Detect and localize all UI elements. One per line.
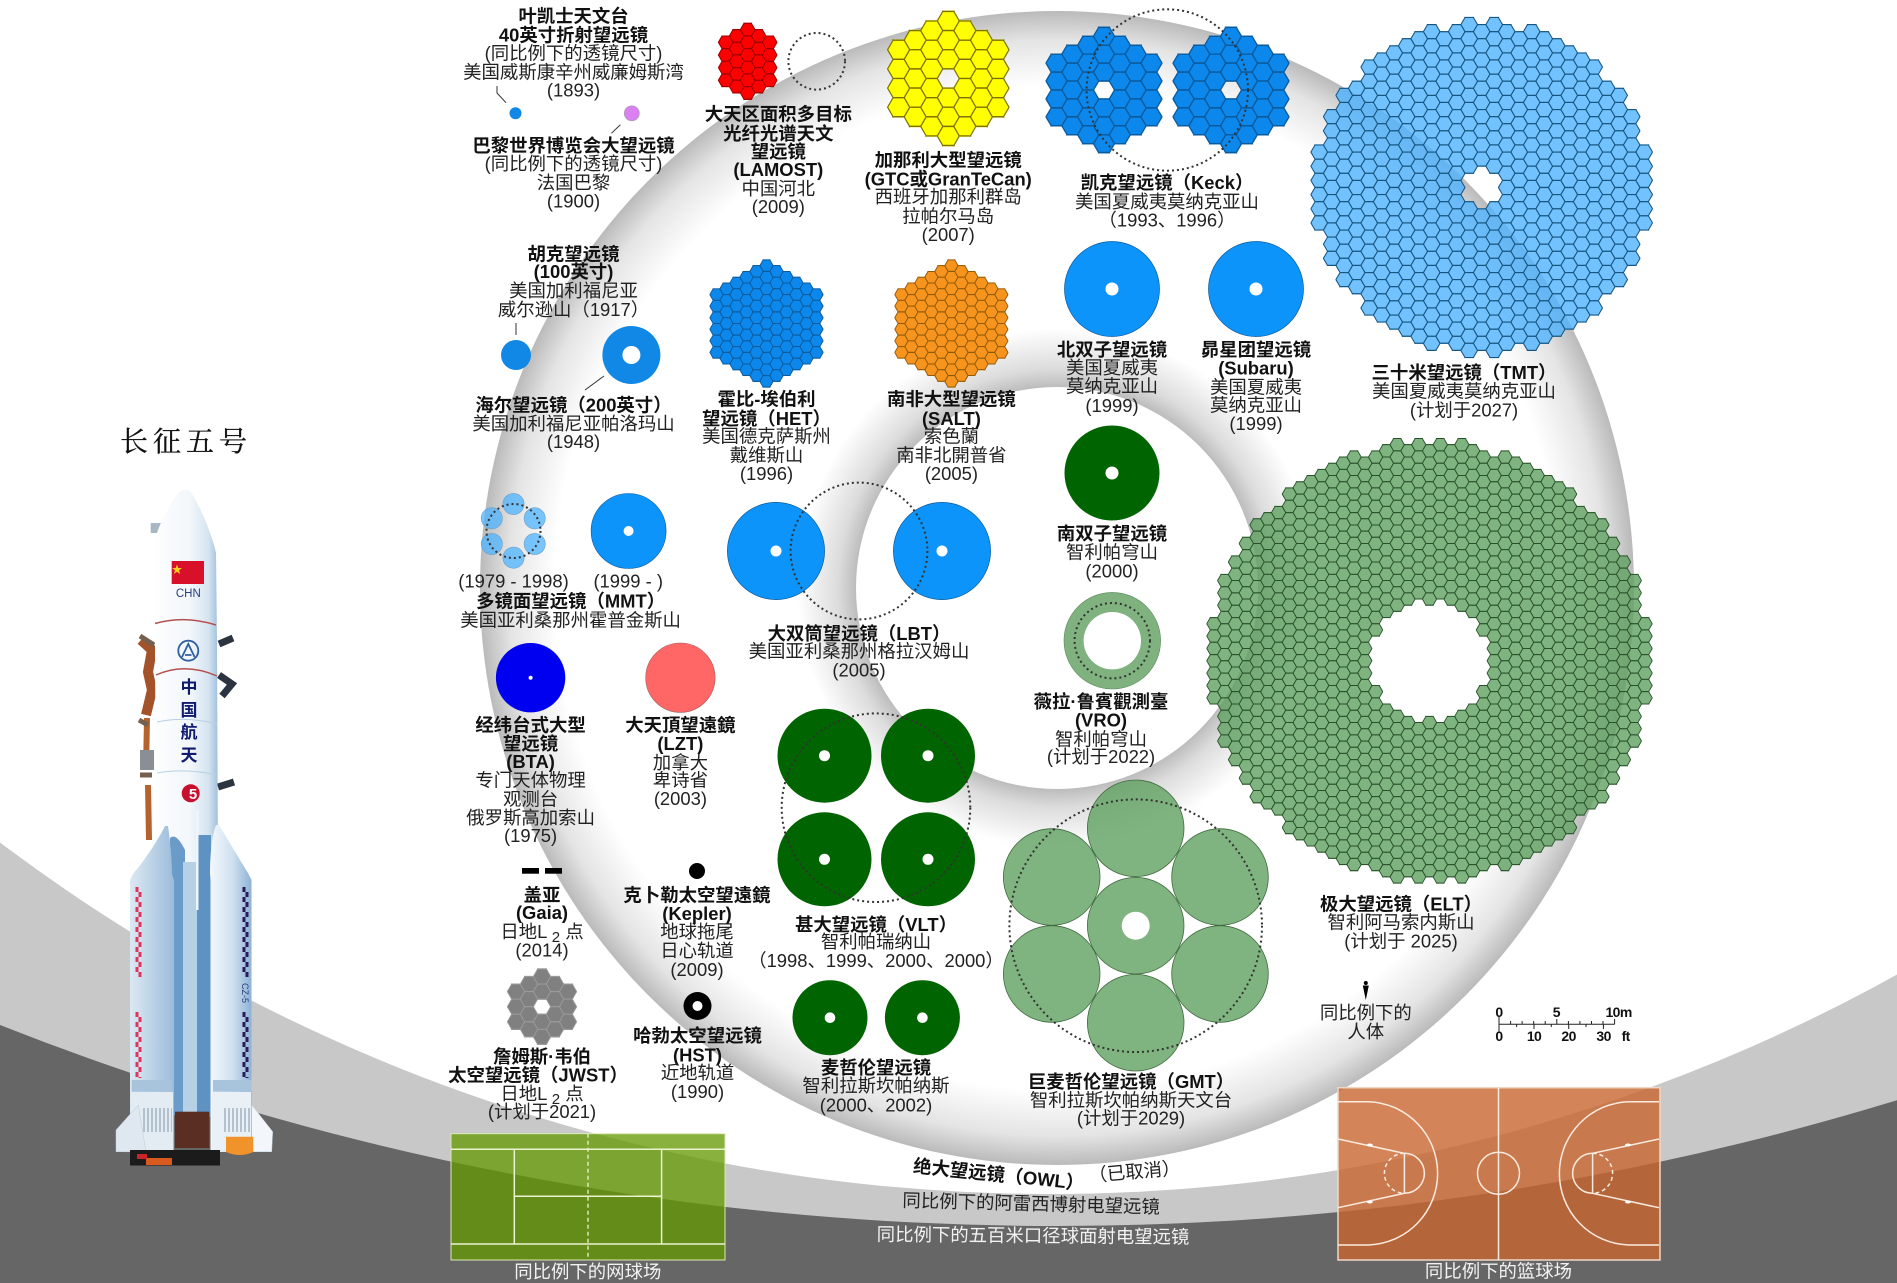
icon: LZT mirror bbox=[646, 643, 715, 712]
label: VLT: 智利帕瑞纳山 bbox=[821, 931, 931, 952]
engine nozzles bbox=[130, 1150, 220, 1166]
label: JWST: 詹姆斯·韦伯 bbox=[493, 1046, 591, 1067]
icon: HET mirror bbox=[710, 259, 824, 388]
label: Kepler: 地球拖尾 bbox=[660, 921, 734, 942]
label: SALT: (2005) bbox=[925, 463, 978, 484]
label: Gaia: 2 bbox=[552, 929, 560, 946]
label: Gaia: (2014) bbox=[515, 940, 569, 960]
label: Keck: （1993、1996） bbox=[1098, 210, 1236, 230]
telescope: Hooker bbox=[498, 244, 649, 370]
label: LZT: 大天頂望遠鏡 bbox=[625, 714, 736, 736]
icon: Hale mirror bbox=[585, 326, 660, 390]
icon: Long March logo: 5 bbox=[189, 786, 197, 803]
rocket marking: CHN: CHN bbox=[176, 588, 201, 600]
label: Yerkes: 美国威斯康辛州威廉姆斯湾 bbox=[463, 62, 684, 82]
icon: JWST mirror bbox=[507, 968, 577, 1045]
title: Long March 5: 长征五号 bbox=[120, 426, 252, 458]
icon: Keck II mirror bbox=[1172, 26, 1290, 154]
label: TMT: 三十米望远镜（TMT） bbox=[1372, 362, 1556, 383]
label: Hooker: 美国加利福尼亚 bbox=[509, 280, 638, 301]
scale bar: 5 bbox=[1553, 1004, 1561, 1020]
telescope: Magellan bbox=[792, 980, 960, 1116]
label: SALT: (SALT) bbox=[922, 408, 981, 429]
label: JWST: 太空望远镜（JWST） bbox=[448, 1064, 628, 1086]
caption: OWL cancelled: （已取消） bbox=[1088, 1157, 1181, 1186]
label: Gemini South: (2000) bbox=[1085, 560, 1139, 582]
label: BTA: (1975) bbox=[504, 825, 557, 846]
icon: Subaru mirror bbox=[1208, 242, 1304, 336]
label: TMT: 美国夏威夷莫纳克亚山 bbox=[1372, 380, 1556, 402]
rocket marking: China Aerospace bbox=[180, 678, 198, 765]
icon: Gemini North mirror bbox=[1064, 242, 1160, 336]
label: Magellan: (2000、2002) bbox=[820, 1094, 932, 1116]
label: Gemini North: 北双子望远镜 bbox=[1057, 339, 1167, 360]
icon: Long March logo bbox=[182, 784, 200, 803]
icon: Hooker mirror bbox=[501, 323, 531, 370]
caption: tennis court: 同比例下的网球场 bbox=[514, 1261, 661, 1282]
label: Hooker: 威尔逊山（1917） bbox=[498, 299, 649, 320]
label: Hooker: 胡克望远镜 bbox=[528, 244, 619, 264]
telescope: Paris Exposition bbox=[472, 106, 675, 212]
icon: Yerkes lens bbox=[497, 86, 522, 119]
label: Subaru: 美国夏威夷 bbox=[1210, 376, 1302, 398]
label: Hale: 美国加利福尼亚帕洛玛山 bbox=[472, 413, 675, 434]
label: LAMOST: 大天区面积多目标 bbox=[705, 104, 852, 124]
scale bar: 10 bbox=[1527, 1028, 1542, 1044]
label: Yerkes: (同比例下的透镜尺寸) bbox=[485, 42, 662, 64]
telescope: LZT bbox=[625, 643, 736, 809]
icon: VRO mirror bbox=[1064, 592, 1161, 689]
icon: Kepler mirror bbox=[689, 863, 705, 879]
label: HET: 戴维斯山 bbox=[730, 444, 803, 466]
icon: MMT old six mirrors bbox=[481, 493, 545, 568]
label: GMT: 智利拉斯坎帕纳斯天文台 bbox=[1030, 1090, 1232, 1110]
label: HET: 霍比-埃伯利 bbox=[717, 388, 816, 410]
label: GTC: (GTC或GranTeCan) bbox=[865, 168, 1032, 190]
telescope: MMT bbox=[458, 493, 681, 630]
icon: Gaia mirrors bbox=[522, 868, 562, 874]
caption: OWL: 绝大望远镜（OWL） bbox=[912, 1155, 1085, 1194]
label: LAMOST: 中国河北 bbox=[742, 178, 815, 199]
label: Gaia: (Gaia) bbox=[516, 902, 568, 923]
label: ELT: 极大望远镜（ELT） bbox=[1320, 894, 1482, 914]
telescope: VRO bbox=[1034, 592, 1168, 767]
telescope: GMT bbox=[1003, 780, 1268, 1128]
label: GTC: (2007) bbox=[922, 224, 975, 245]
icon: GMT mirrors bbox=[1003, 780, 1268, 1071]
icon: Paris lens bbox=[611, 106, 639, 133]
icon: Keck I mirror bbox=[1045, 26, 1163, 154]
label: GTC: 拉帕尔马岛 bbox=[902, 206, 994, 226]
telescope: ELT bbox=[1207, 408, 1663, 951]
label: JWST: 点 bbox=[560, 1083, 584, 1104]
label: Kepler: (2009) bbox=[670, 959, 724, 980]
scale figure: human bbox=[1320, 981, 1412, 1042]
telescope: BTA bbox=[466, 643, 595, 846]
telescope: JWST bbox=[448, 968, 616, 1122]
label: JWST: 2 bbox=[552, 1091, 560, 1108]
label: LAMOST: 望远镜 bbox=[751, 141, 806, 162]
telescope: LBT bbox=[727, 483, 991, 680]
label: Subaru: 昴星团望远镜 bbox=[1201, 339, 1311, 360]
label: Paris Exposition: (同比例下的透镜尺寸) bbox=[485, 153, 662, 174]
scale bar: 0 bbox=[1495, 1004, 1503, 1020]
label: HET: 望远镜（HET） bbox=[702, 408, 831, 429]
caption: basketball court: 同比例下的篮球场 bbox=[1425, 1260, 1572, 1282]
label: human: 同比例下的 bbox=[1320, 1002, 1412, 1023]
label: Hooker: (100英寸) bbox=[534, 261, 613, 282]
label: SALT: 索色蘭 bbox=[924, 426, 979, 446]
label: BTA: 望远镜 bbox=[503, 733, 558, 754]
telescope: TMT bbox=[1310, 16, 1653, 420]
icon: Gemini South mirror bbox=[1064, 426, 1160, 520]
label: LAMOST: 光纤光谱天文 bbox=[723, 123, 833, 144]
label: JWST: (计划于2021) bbox=[488, 1101, 596, 1122]
label: Magellan: 麦哲伦望远镜 bbox=[821, 1057, 931, 1078]
scale bar: 0 bbox=[1495, 1028, 1503, 1044]
label: LZT: 加拿大 bbox=[653, 752, 708, 773]
caption: FAST: 同比例下的五百米口径球面射电望远镜 bbox=[877, 1224, 1189, 1247]
icon: human silhouette bbox=[1363, 981, 1369, 1000]
scale bar: 30 bbox=[1596, 1028, 1612, 1044]
label: Kepler: (Kepler) bbox=[662, 903, 732, 924]
rocket marking: China Aerospace: 天 bbox=[180, 746, 198, 765]
rocket marking: China Aerospace: 航 bbox=[180, 722, 198, 742]
scale bar: 10m bbox=[1605, 1004, 1632, 1020]
label: BTA: 观测台 bbox=[503, 788, 558, 810]
icon: VLT mirrors bbox=[778, 709, 975, 906]
label: VLT: 甚大望远镜（VLT） bbox=[795, 914, 957, 935]
label: Hubble: 近地轨道 bbox=[661, 1062, 734, 1083]
icon: GTC mirror bbox=[887, 10, 1010, 146]
label: Gaia: 点 bbox=[560, 921, 584, 942]
telescope: Gaia bbox=[500, 868, 584, 960]
label: Subaru: 莫纳克亚山 bbox=[1210, 394, 1302, 416]
scale bar: 20 bbox=[1561, 1028, 1577, 1044]
label: ELT: 智利阿马索内斯山 bbox=[1327, 912, 1475, 932]
icon: Magellan mirrors bbox=[792, 980, 960, 1055]
label: Subaru: (Subaru) bbox=[1218, 358, 1294, 378]
label: VLT: （1998、1999、2000、2000） bbox=[748, 950, 1004, 971]
label: VRO: 智利帕穹山 bbox=[1055, 728, 1147, 750]
telescope: VLT bbox=[748, 709, 1004, 971]
label: GTC: 西班牙加那利群岛 bbox=[875, 186, 1022, 207]
telescope: SALT bbox=[888, 259, 1016, 484]
icon: Keck dotted aperture bbox=[1087, 9, 1248, 171]
label: LZT: (LZT) bbox=[657, 733, 703, 754]
icon: MMT new mirror bbox=[591, 494, 666, 568]
label: BTA: 专门天体物理 bbox=[475, 770, 586, 790]
label: MMT: 美国亚利桑那州霍普金斯山 bbox=[460, 610, 681, 630]
label: MMT: (1979 - 1998) bbox=[458, 570, 569, 592]
label: LBT: 美国亚利桑那州格拉汉姆山 bbox=[749, 640, 969, 662]
label: LBT: 大双筒望远镜（LBT） bbox=[768, 623, 950, 644]
label: Gemini North: (1999) bbox=[1085, 395, 1139, 416]
telescope: Yerkes bbox=[463, 6, 684, 119]
label: BTA: 经纬台式大型 bbox=[475, 714, 586, 736]
label: Paris Exposition: (1900) bbox=[547, 190, 600, 212]
icon: SALT mirror bbox=[894, 259, 1008, 388]
label: Paris Exposition: 巴黎世界博览会大望远镜 bbox=[472, 135, 675, 156]
label: VRO: 薇拉·鲁賓觀測臺 bbox=[1034, 691, 1168, 712]
label: GMT: (计划于2029) bbox=[1077, 1108, 1185, 1128]
scale bar: ft bbox=[1622, 1028, 1631, 1044]
rocket: Long March 5 bbox=[116, 490, 273, 1166]
label: Magellan: 智利拉斯坎帕纳斯 bbox=[802, 1075, 950, 1096]
telescope: Gemini North bbox=[1057, 242, 1167, 416]
telescope: Keck bbox=[1045, 8, 1290, 228]
label: Yerkes: (1893) bbox=[547, 80, 600, 100]
label: Paris Exposition: 法国巴黎 bbox=[537, 172, 610, 193]
label: human: 人体 bbox=[1347, 1021, 1384, 1042]
label: Gemini North: 莫纳克亚山 bbox=[1066, 376, 1158, 396]
engine section bbox=[175, 1112, 209, 1148]
telescope: Gemini South bbox=[1057, 426, 1167, 582]
label: SALT: 南非大型望远镜 bbox=[887, 388, 1016, 410]
label: Hale: 海尔望远镜（200英寸） bbox=[475, 394, 672, 416]
tennis court bbox=[451, 1134, 725, 1260]
basketball court bbox=[1338, 1088, 1660, 1260]
OWL ring bbox=[480, 11, 1634, 1165]
label: BTA: 俄罗斯高加索山 bbox=[466, 807, 595, 828]
telescope: LAMOST bbox=[706, 22, 852, 217]
label: GTC: 加那利大型望远镜 bbox=[875, 150, 1022, 170]
label: LAMOST: (2009) bbox=[752, 196, 805, 217]
label: Subaru: (1999) bbox=[1229, 413, 1283, 434]
caption: Arecibo: 同比例下的阿雷西博射电望远镜 bbox=[902, 1190, 1160, 1217]
label: LBT: (2005) bbox=[832, 660, 886, 680]
label: VRO: (计划于2022) bbox=[1047, 746, 1155, 767]
right fin bbox=[252, 1105, 273, 1152]
rocket marking: China Aerospace: 中 bbox=[180, 678, 198, 697]
label: LZT: (2003) bbox=[654, 788, 707, 809]
label: LZT: 卑诗省 bbox=[653, 770, 708, 790]
label: HET: 美国德克萨斯州 bbox=[702, 426, 831, 446]
flag star bbox=[172, 564, 182, 574]
icon: ELT mirror bbox=[1206, 438, 1653, 884]
label: Yerkes: 40英寸折射望远镜 bbox=[499, 24, 648, 46]
icon: flag bbox=[172, 561, 204, 584]
left fin bbox=[116, 1105, 146, 1152]
label: BTA: (BTA) bbox=[506, 751, 555, 772]
icon: BTA mirror bbox=[496, 643, 565, 712]
label: LAMOST: (LAMOST) bbox=[733, 159, 823, 180]
label: Gaia: 日地L bbox=[500, 921, 584, 946]
label: TMT: (计划于2027) bbox=[1410, 400, 1518, 420]
label: Hubble: 哈勃太空望远镜 bbox=[633, 1025, 762, 1046]
left booster bbox=[130, 826, 174, 1152]
label: Hubble: (1990) bbox=[671, 1081, 724, 1102]
label: Kepler: 克卜勒太空望遠鏡 bbox=[623, 884, 771, 906]
label: Gemini South: 南双子望远镜 bbox=[1057, 523, 1167, 544]
label: Gemini North: 美国夏威夷 bbox=[1066, 357, 1158, 378]
label: ELT: (计划于 2025) bbox=[1344, 930, 1458, 952]
label: Kepler: 日心轨道 bbox=[660, 940, 734, 961]
icon: TMT mirror bbox=[1310, 16, 1653, 358]
icon: LBT mirrors bbox=[727, 483, 991, 619]
label: HET: (1996) bbox=[740, 463, 793, 484]
icon: CNSA logo bbox=[178, 641, 198, 661]
telescope: Hale bbox=[472, 326, 675, 452]
rocket marking: China Aerospace: 国 bbox=[180, 701, 198, 720]
telescope: Kepler bbox=[623, 863, 771, 980]
label: GMT: 巨麦哲伦望远镜（GMT） bbox=[1028, 1071, 1234, 1092]
icon: Hubble mirror bbox=[684, 992, 712, 1020]
telescope: HET bbox=[702, 259, 829, 484]
label: Keck: 美国夏威夷莫纳克亚山 bbox=[1075, 191, 1259, 212]
label: VRO: (VRO) bbox=[1075, 710, 1127, 730]
label: Hubble: (HST) bbox=[673, 1044, 722, 1066]
telescope: Hubble bbox=[633, 992, 762, 1102]
label: Gemini South: 智利帕穹山 bbox=[1066, 542, 1158, 562]
orange fairing tab bbox=[226, 1137, 253, 1155]
telescope: Subaru bbox=[1201, 242, 1311, 434]
label: Hale: (1948) bbox=[547, 431, 600, 452]
rocket marking: CZ-5: CZ-5 bbox=[240, 983, 250, 1003]
icon: LAMOST mirror bbox=[718, 22, 778, 100]
label: Keck: 凯克望远镜（Keck） bbox=[1081, 172, 1253, 193]
label: JWST: 日地L bbox=[500, 1083, 584, 1108]
label: MMT: (1999 - ) bbox=[593, 570, 663, 592]
label: MMT: 多镜面望远镜（MMT） bbox=[476, 590, 665, 612]
label: Yerkes: 叶凯士天文台 bbox=[518, 6, 629, 26]
scale bar bbox=[1495, 1004, 1632, 1044]
label: Gaia: 盖亚 bbox=[524, 884, 560, 906]
icon: LAMOST dotted aperture bbox=[788, 33, 845, 90]
right booster bbox=[210, 825, 252, 1152]
telescope: GTC bbox=[866, 10, 1031, 245]
label: SALT: 南非北開普省 bbox=[896, 444, 1007, 466]
